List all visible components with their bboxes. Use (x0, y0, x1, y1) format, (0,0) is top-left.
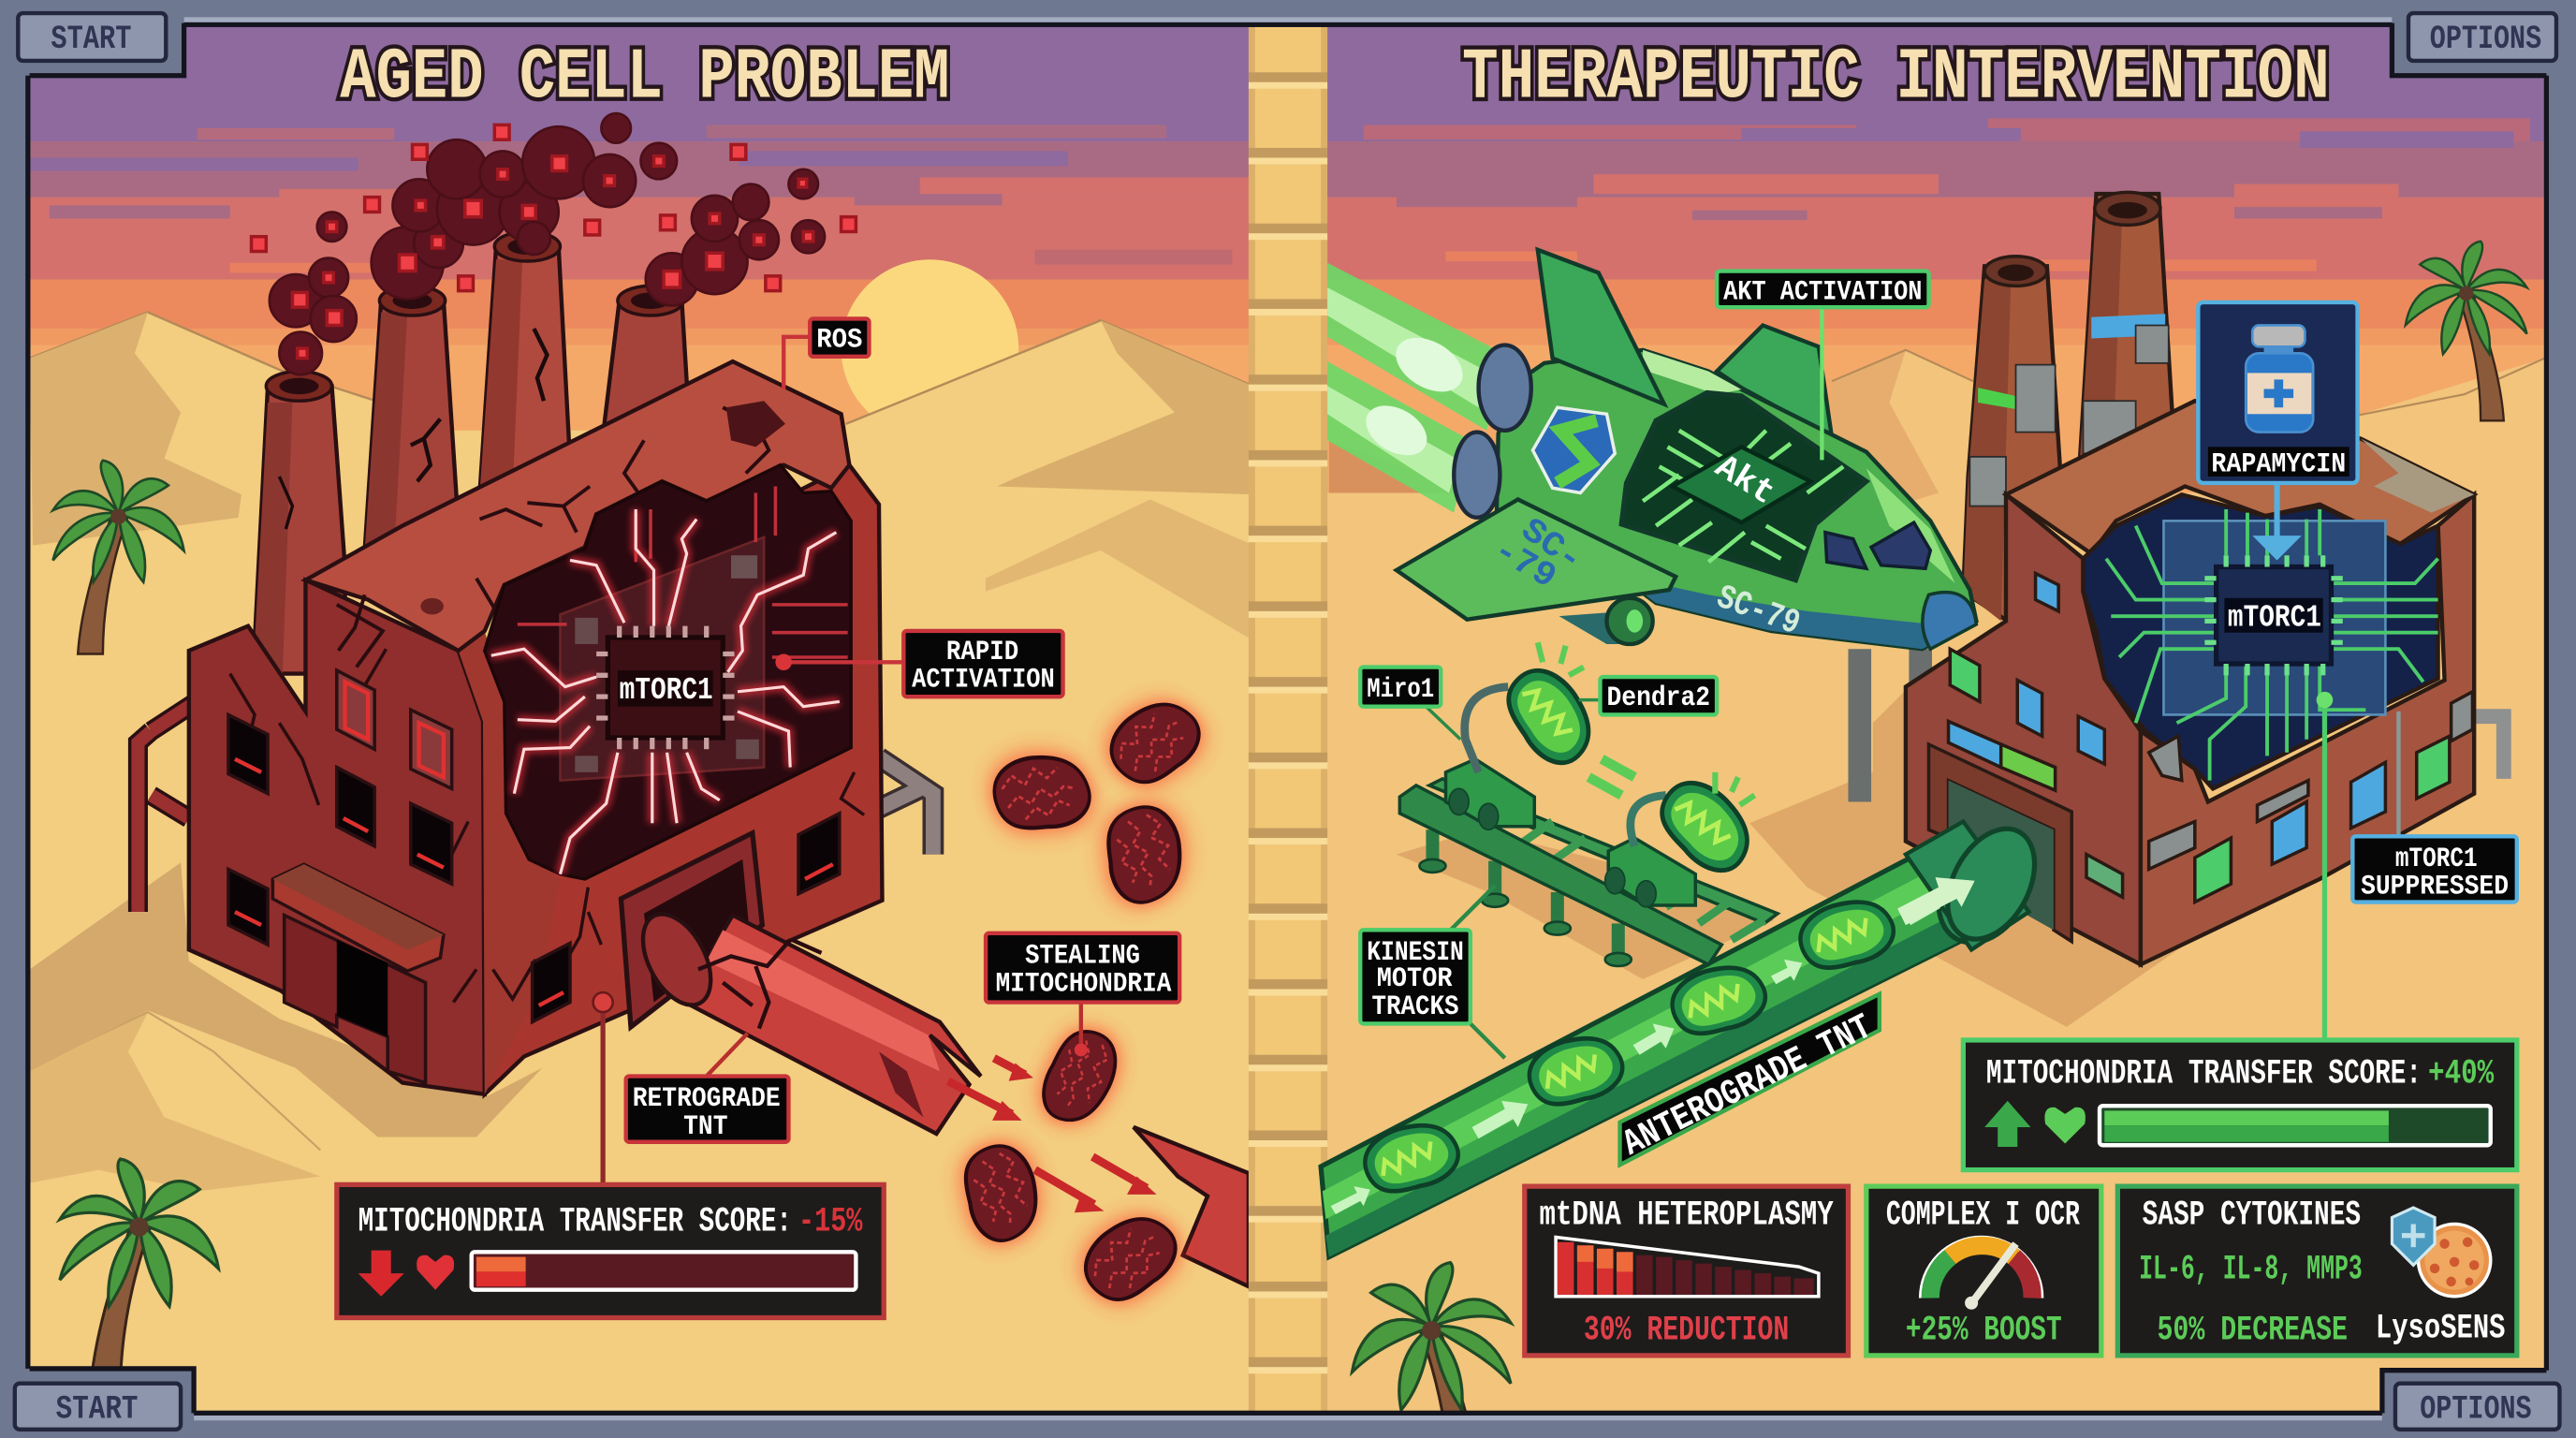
label: kinesin motor tracks (1360, 886, 1505, 1058)
icon: down arrow (359, 1251, 404, 1297)
chimney 3 (479, 231, 572, 493)
door (272, 864, 444, 1083)
sparks and exchange arrows (1538, 642, 1754, 805)
label: retrograde TNT: TNT (683, 1110, 728, 1142)
label: stealing mitochondria (986, 933, 1179, 1056)
label: rapid activation: RAPID (946, 636, 1018, 668)
start button top: START (51, 21, 131, 58)
panel: left transfer score (337, 992, 884, 1318)
panel: SASP cytokines: IL-6, IL-8, MMP3 (2139, 1250, 2363, 1289)
panel: mtDNA heteroplasmy (1525, 1186, 1848, 1356)
repaired windows (1949, 574, 2472, 902)
engines (1454, 345, 1531, 518)
options button top: OPTIONS (2430, 21, 2541, 58)
chip mTORC1 (2204, 555, 2343, 675)
label: kinesin motor tracks: MOTOR (1377, 962, 1453, 994)
window ember glow (235, 682, 833, 1005)
windows left (228, 670, 840, 1022)
opening circuit cavity (485, 465, 851, 879)
left pipe (138, 703, 194, 912)
jet SC-79 (1327, 250, 1976, 649)
anterograde tunnel nanotube (1321, 809, 2054, 1257)
icon: up arrow (1984, 1101, 2030, 1147)
chimney 1 (1963, 257, 2060, 621)
label: rapid activation: ACTIVATION (912, 664, 1055, 696)
label: mTORC1 suppressed (2352, 712, 2517, 902)
left wall (1906, 494, 2141, 964)
options button bottom: OPTIONS (2420, 1391, 2532, 1429)
chimney 2 (365, 286, 460, 550)
chimney 4 (603, 286, 690, 435)
label: Dendra2: Dendra2 (1606, 682, 1710, 713)
cockpit windows (1825, 522, 1930, 568)
label: anterograde TNT: ANTEROGRADE TNT (1617, 1006, 1879, 1166)
label: kinesin motor tracks: KINESIN (1367, 936, 1464, 968)
landing gear (1559, 598, 1653, 644)
wall cracks (230, 649, 864, 1003)
label: Akt activation (1717, 271, 1928, 460)
start button bottom (0, 1369, 194, 1438)
mitochondria being stolen (944, 681, 1215, 1321)
opening circuit cavity (2083, 494, 2438, 788)
door frame (1928, 744, 2071, 942)
palm tree top left (53, 461, 184, 654)
icon: shield (2392, 1208, 2435, 1265)
red tunnel nanotube torn (629, 902, 981, 1134)
right grey pipe (879, 757, 933, 855)
rapamycin panel (2198, 302, 2358, 560)
pipe doorway (621, 833, 762, 1027)
panel: mtDNA heteroplasmy: 30% REDUCTION (1584, 1311, 1789, 1350)
desert sand and dunes (30, 312, 2546, 1412)
label: retrograde TNT (626, 1034, 788, 1142)
flow arrows (1331, 877, 1975, 1214)
gauge (1921, 1238, 2042, 1310)
smoke plumes (270, 113, 825, 374)
exhaust trails (1327, 263, 1503, 513)
panel: left transfer score: -15% (798, 1203, 863, 1242)
progress bar (2100, 1106, 2491, 1145)
wing marking: SC- (1514, 511, 1589, 580)
fuselage (1497, 350, 1976, 649)
chimney 2 (2080, 192, 2175, 460)
chip mTORC1: mTORC1 (2228, 601, 2321, 637)
icon: heart (417, 1255, 454, 1290)
right pipe (2472, 716, 2504, 779)
tail fin (1538, 250, 1664, 404)
label: ROS (783, 318, 869, 389)
green mitochondria carried (1491, 658, 1608, 774)
roof (2006, 401, 2474, 553)
label: ROS: ROS (816, 323, 862, 355)
panel: SASP cytokines: SASP CYTOKINES (2143, 1196, 2361, 1235)
panel: right transfer score: MITOCHONDRIA TRANSFER SCORE: (1986, 1055, 2422, 1094)
start button bottom: START (56, 1391, 138, 1429)
tube collar over doorway (1897, 814, 2052, 954)
red tunnel far fragment (1134, 1127, 1249, 1286)
second tail fin (1717, 325, 1832, 437)
label: stealing mitochondria: STEALING (1025, 939, 1140, 971)
label: stealing mitochondria: MITOCHONDRIA (996, 967, 1171, 999)
options button top (2392, 0, 2576, 76)
label: Akt activation: AKT ACTIVATION (1723, 275, 1922, 307)
panel: right transfer score (1963, 692, 2517, 1170)
conveyor track (1399, 642, 1778, 966)
circuit bay with Akt chip: Akt (1707, 448, 1781, 514)
start button top (0, 0, 184, 76)
roof (305, 361, 849, 651)
label: kinesin motor tracks: TRACKS (1372, 990, 1459, 1022)
circuit bay with Akt chip (1621, 392, 1866, 580)
panel: aged factory (138, 231, 933, 1094)
cart 2 (1605, 795, 1695, 907)
panel: right transfer score: +40% (2428, 1055, 2495, 1094)
icon: heart (2044, 1108, 2086, 1143)
right wall (485, 465, 882, 1094)
palm tree bottom left (60, 1159, 218, 1393)
label: mTORC1 suppressed: mTORC1 (2395, 843, 2478, 874)
panel: SASP cytokines: LysoSENS (2376, 1310, 2506, 1349)
wing (1397, 500, 1676, 620)
wing marking: -79 (1486, 531, 1562, 598)
panel: SASP cytokines: 50% DECREASE (2157, 1311, 2348, 1350)
panel: complex I OCR (1866, 1186, 2101, 1356)
progress bar (472, 1252, 856, 1290)
red lightning (491, 509, 840, 874)
sun (842, 259, 1018, 437)
central divider column (1249, 26, 1327, 1412)
logo S badge (1533, 407, 1615, 493)
palm tree top right (2406, 242, 2527, 420)
title: therapeutic intervention: THERAPEUTIC INTERVENTION (1462, 38, 2330, 120)
wing marking (1486, 511, 1589, 598)
declining bar chart (1556, 1238, 1819, 1297)
support pillars (1860, 649, 1921, 801)
label: Miro1 (1360, 668, 1460, 740)
panel: repaired factory (1860, 192, 2504, 964)
title: aged cell problem: AGED CELL PROBLEM (340, 38, 949, 120)
label: retrograde TNT: RETROGRADE (633, 1082, 781, 1114)
chimney 1 (253, 372, 345, 674)
corner pier (459, 631, 560, 1094)
roof cracks (337, 407, 768, 668)
desert sky (30, 26, 2545, 509)
right wall (2141, 494, 2474, 964)
red transfer arrows (948, 1058, 1157, 1212)
chip mTORC1 (596, 626, 735, 749)
chip mTORC1: mTORC1 (620, 673, 713, 709)
label: rapid activation (775, 631, 1063, 697)
nose (1923, 593, 1976, 649)
icon: lysosome (2419, 1224, 2491, 1297)
panel: complex I OCR: COMPLEX I OCR (1886, 1196, 2081, 1235)
options button bottom (2382, 1371, 2576, 1438)
label: mTORC1 suppressed: SUPPRESSED (2361, 871, 2509, 902)
label: Dendra2 (1579, 677, 1717, 714)
panel: complex I OCR: +25% BOOST (1906, 1311, 2062, 1350)
ROS particles (252, 125, 856, 359)
rapamycin panel: RAPAMYCIN (2211, 448, 2346, 480)
cart 1 (1445, 687, 1534, 829)
lower left wall (189, 580, 485, 1094)
label: Miro1: Miro1 (1367, 673, 1434, 705)
panel: left transfer score: MITOCHONDRIA TRANSFER SCORE: (359, 1203, 792, 1242)
palm tree bottom centre (1350, 1260, 1515, 1411)
panel: SASP cytokines (2117, 1186, 2517, 1356)
icon: vial (2246, 325, 2313, 433)
hull marking: SC-79 (1711, 579, 1805, 644)
panel: mtDNA heteroplasmy: mtDNA HETEROPLASMY (1540, 1196, 1834, 1235)
